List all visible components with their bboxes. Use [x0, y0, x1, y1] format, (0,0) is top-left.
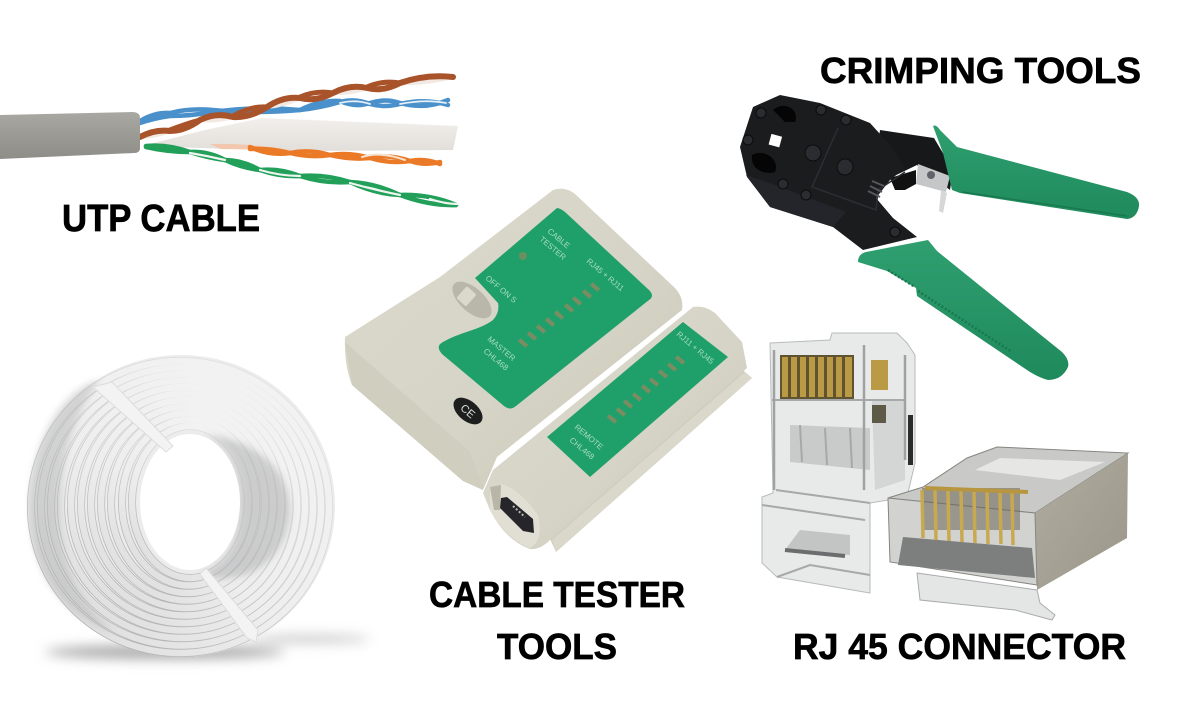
inner wall shading — [200, 434, 290, 578]
master LEDs — [518, 282, 600, 348]
CE badge: CE — [458, 402, 477, 421]
panel: RJ45 connectors photo — [762, 333, 1128, 620]
power LED — [519, 252, 527, 260]
remote green panel — [547, 322, 728, 477]
master panel text: TESTER — [538, 235, 568, 262]
panel: white cable coil photo — [27, 355, 370, 659]
master panel text: RJ45 + RJ11 — [585, 257, 626, 293]
master panel text: OFF ON S — [484, 274, 518, 305]
gold contacts — [780, 355, 854, 399]
CE badge — [449, 392, 487, 430]
silver latch — [916, 164, 950, 213]
remote panel text: CHL468 — [568, 436, 596, 462]
master panel text — [482, 227, 626, 373]
label: UTP cable: UTP CABLE — [62, 198, 260, 240]
label: cable tester tools: TOOLS — [497, 626, 617, 667]
crimper upper arm — [875, 130, 953, 190]
left side shading — [30, 380, 115, 632]
master unit body — [345, 189, 682, 490]
metal side — [1035, 453, 1128, 590]
brown twisted pair — [140, 76, 453, 137]
remote LEDs — [607, 355, 685, 424]
remote unit flange — [544, 366, 752, 552]
panel: cable tester photo — [345, 189, 752, 552]
power switch — [446, 275, 498, 325]
remote panel text — [568, 330, 716, 462]
orange twisted pair — [250, 147, 440, 164]
crimping jaws cutouts — [752, 106, 796, 173]
blue twisted pair — [140, 100, 448, 123]
gold pins — [922, 488, 1020, 530]
coil centre hole — [140, 434, 240, 570]
panel: crimping tool photo — [740, 95, 1139, 380]
connector top — [888, 447, 1128, 513]
rivets — [743, 105, 900, 237]
shielded connector — [888, 447, 1128, 620]
upper cable tie — [93, 382, 173, 452]
lower green handle — [858, 240, 1068, 380]
connector front — [888, 498, 1037, 585]
coil base — [27, 355, 335, 657]
connector latch — [917, 573, 1055, 620]
white spline filler — [142, 118, 458, 151]
coil windings — [31, 361, 329, 653]
lower cable tie — [200, 568, 258, 642]
label: cable tester tools: CABLE TESTER — [429, 574, 685, 615]
spring — [868, 181, 884, 197]
green twisted pair — [146, 146, 458, 205]
remote unit body — [483, 307, 747, 549]
plate seam — [812, 128, 905, 210]
grey cable jacket — [0, 112, 140, 159]
label: cable tester tools — [429, 574, 685, 667]
master green panel — [439, 208, 652, 408]
black crimper head — [740, 95, 917, 250]
transparent connector — [762, 333, 915, 593]
panel: UTP cable photo — [0, 76, 458, 205]
master panel text: CHL468 — [482, 347, 510, 373]
black spring arm — [890, 170, 916, 190]
remote panel text: RJ11 + RJ45 — [675, 330, 716, 366]
master panel text: MASTER — [486, 335, 517, 363]
label: RJ45 connector: RJ 45 CONNECTOR — [793, 626, 1126, 667]
master panel text: CABLE — [546, 227, 572, 250]
RJ45 socket — [490, 484, 540, 548]
upper green handle — [933, 126, 1139, 219]
remote panel text: REMOTE — [573, 423, 605, 452]
label: crimping tools: CRIMPING TOOLS — [820, 50, 1141, 91]
coil floor shadow — [45, 635, 370, 659]
